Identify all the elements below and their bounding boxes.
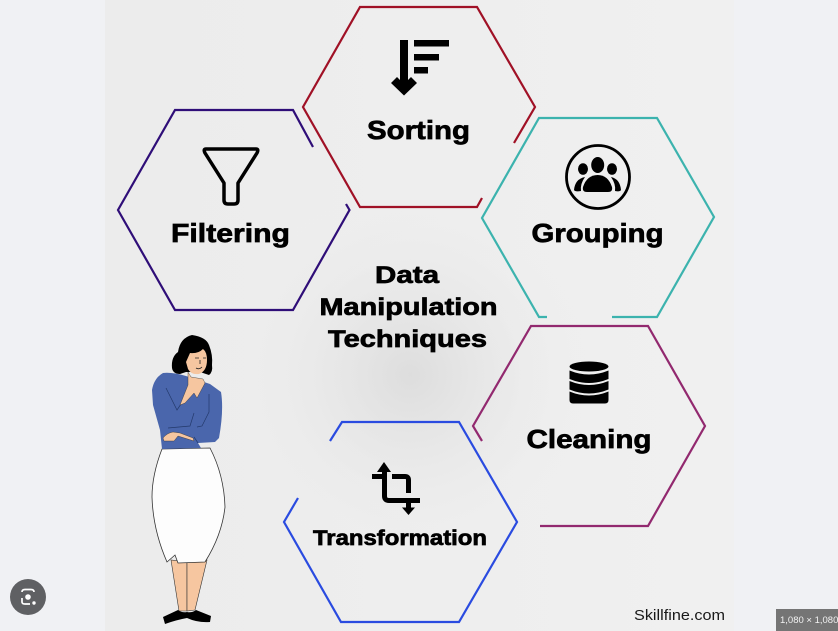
panel: grouping [482,118,714,317]
image dimensions badge [776,609,838,631]
panel: transformation [284,422,517,622]
face [186,349,207,374]
cleaning label: Cleaning [526,424,652,454]
filtering label: Filtering [171,218,290,248]
transformation label: Transformation [313,527,487,550]
hair [172,335,212,375]
icon: group of people [566,146,630,208]
cleaning hexagon outline [473,326,705,526]
title: Manipulation [320,294,498,321]
sorting label: Sorting [367,115,470,145]
panel: sorting [303,7,535,207]
transformation hexagon outline [284,422,517,622]
image background panel [105,0,734,631]
image dimensions badge: 1,080 × 1,080 [780,615,838,626]
shoes [163,610,211,624]
skirt [152,448,225,563]
icon: database [570,362,608,404]
panel: filtering [118,110,350,310]
watermark: Skillfine.com: Skillfine.com [634,608,725,624]
icon: sort descending [391,40,449,96]
title: Techniques [328,326,487,353]
neck and raised arm [180,372,205,405]
title [320,262,498,353]
facial features [195,358,206,369]
legs [171,560,187,611]
grouping hexagon outline [482,118,714,317]
icon: funnel [204,149,258,204]
sorting hexagon outline [303,7,535,207]
grouping label: Grouping [532,218,664,248]
illustration: thinking woman [152,335,225,624]
filtering hexagon outline [118,110,350,310]
icon: lens search button [10,579,46,615]
icon: crop arrows [372,462,420,515]
title: Data [375,262,440,289]
blouse [152,373,222,449]
panel: cleaning [473,326,705,526]
blouse lines [166,388,209,443]
forearm and hand [163,432,194,441]
